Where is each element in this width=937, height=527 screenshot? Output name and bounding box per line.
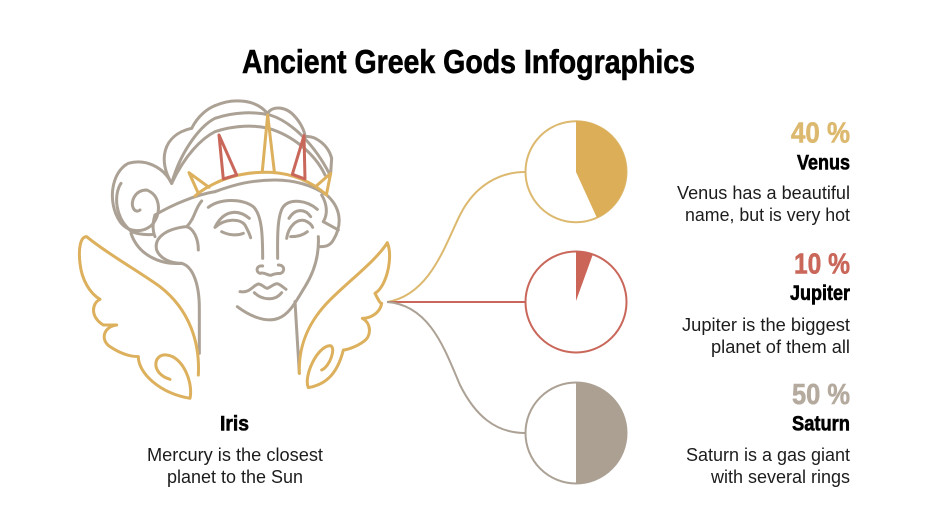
description: Iris: planet to the Sun (167, 467, 303, 487)
percent: Saturn: 50 % (792, 379, 850, 411)
face linework (208, 200, 318, 373)
percent: Jupiter: 10 % (794, 248, 850, 280)
crown red spikes (219, 135, 305, 179)
connector: Saturn (387, 302, 525, 433)
description: Jupiter: Jupiter is the biggest (682, 315, 850, 335)
connector: Venus (387, 172, 525, 302)
pie chart: Venus 40% (526, 121, 627, 222)
description: Venus (677, 183, 850, 225)
description: Iris (147, 445, 323, 487)
block: Venus (677, 118, 850, 225)
crown band hair linework (172, 101, 339, 247)
pie chart: Saturn 50% (526, 382, 627, 484)
illustration: Iris head with wings (79, 101, 390, 398)
name: Jupiter: Jupiter (790, 282, 850, 305)
title: Ancient Greek Gods Infographics (242, 43, 695, 80)
description: Saturn: Saturn is a gas giant (686, 445, 850, 465)
crown gold (189, 115, 331, 196)
description: Iris: Mercury is the closest (147, 445, 323, 465)
left hair linework (112, 106, 215, 353)
description: Jupiter: planet of them all (711, 337, 850, 357)
name: Saturn: Saturn (792, 412, 850, 436)
pie chart: Jupiter 10% (526, 251, 626, 352)
block: Iris (147, 412, 323, 487)
description: Saturn: with several rings (710, 467, 850, 487)
name: Iris: Iris (220, 412, 249, 436)
name: Venus: Venus (797, 152, 850, 174)
left wing (79, 237, 199, 398)
description: Jupiter (682, 315, 850, 357)
description: Venus: name, but is very hot (685, 205, 850, 225)
block: Jupiter (682, 248, 850, 357)
right wing (299, 243, 390, 388)
block: Saturn (686, 379, 850, 487)
description: Saturn (686, 445, 850, 487)
description: Venus: Venus has a beautiful (677, 183, 850, 203)
percent: Venus: 40 % (791, 118, 850, 150)
connector: Jupiter (387, 301, 525, 303)
